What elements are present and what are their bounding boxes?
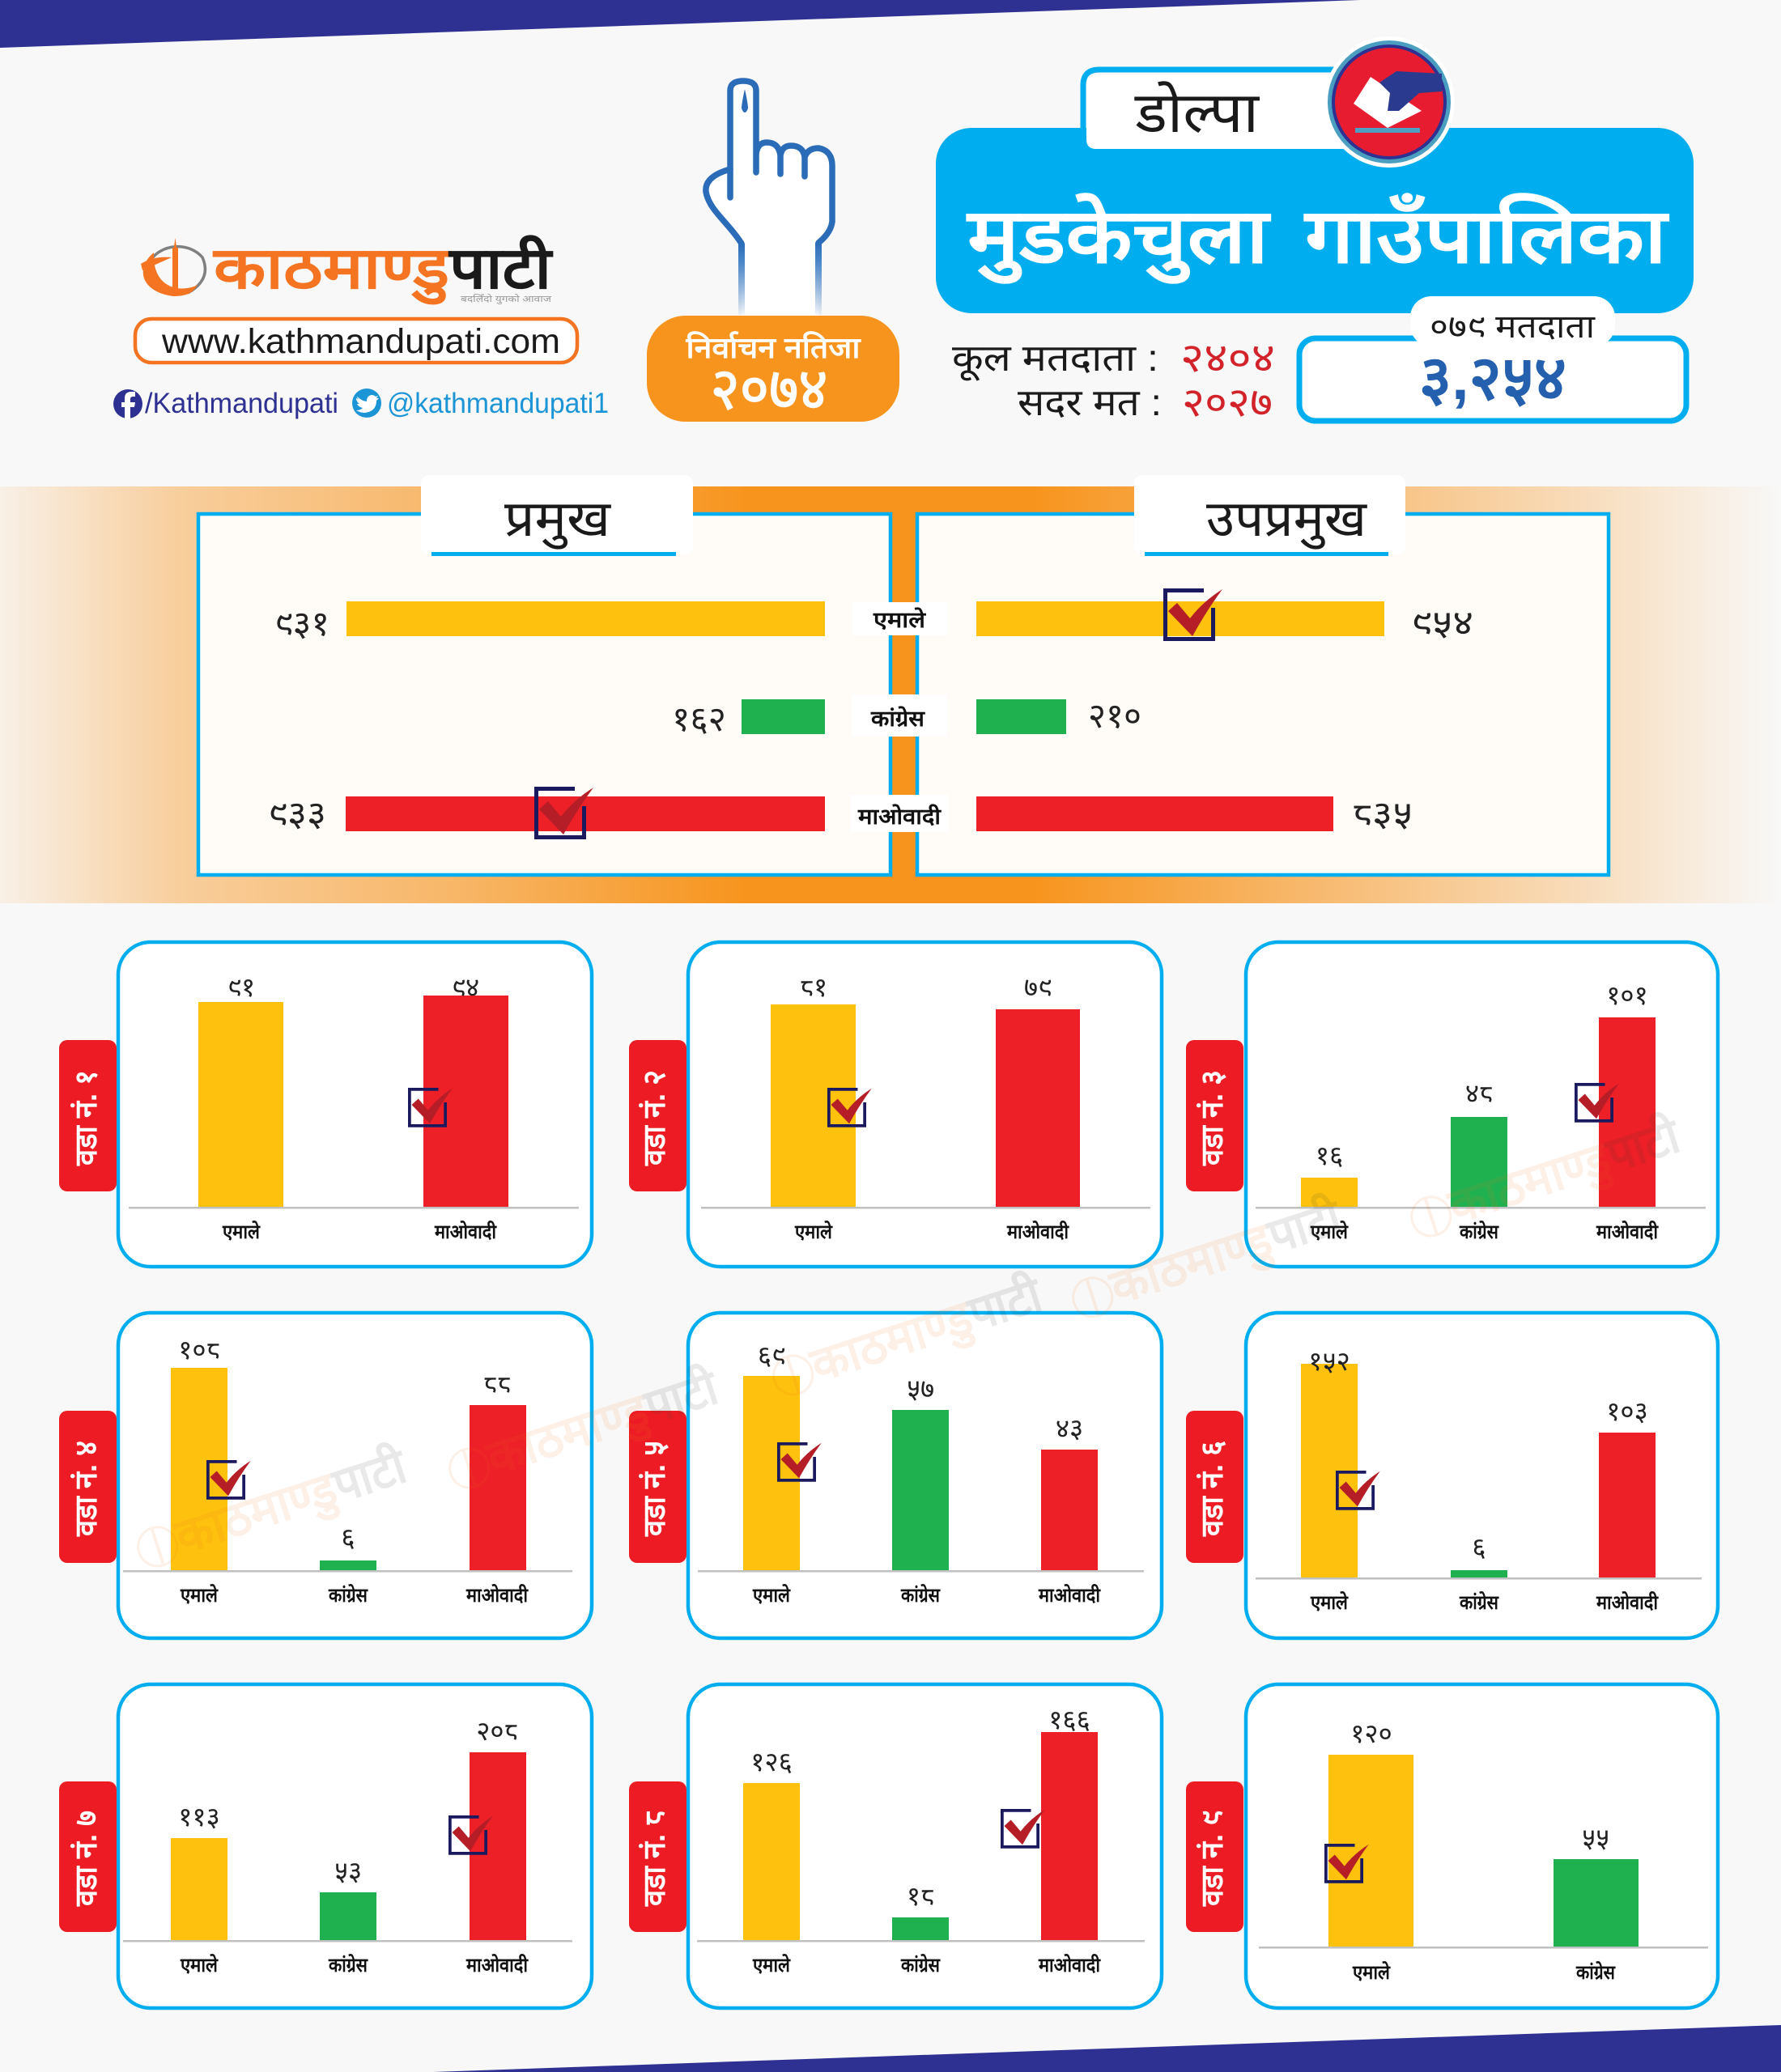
ward 5 label Maoist: माओवादी	[1038, 1584, 1101, 1607]
bar: UML deputy	[976, 601, 1384, 636]
ward 9 tab: वडा नं. ९	[1196, 1811, 1230, 1907]
ward 4	[59, 1313, 592, 1638]
ward 2 value Maoist: ७९	[1024, 972, 1052, 1002]
ward 7 label UML: एमाले	[180, 1954, 219, 1976]
ward 6 label UML: एमाले	[1310, 1591, 1350, 1614]
party label: Maoist: माओवादी	[857, 804, 942, 829]
ward 9 card	[1246, 1684, 1718, 2008]
social links	[113, 388, 609, 419]
party label: Congress	[852, 694, 947, 737]
ward 2 tab	[629, 1040, 686, 1191]
value: Maoist deputy: ८३५	[1352, 795, 1413, 834]
icon: twitter	[352, 388, 381, 418]
ward 6 value Congress: ६	[1472, 1532, 1486, 1562]
ward 9 axis	[1259, 1947, 1708, 1949]
bar: Maoist mayor	[346, 796, 825, 831]
mayor heading	[421, 475, 693, 556]
ward 3 axis	[1256, 1207, 1706, 1209]
2079 voters label: ०७९ मतदाता	[1430, 309, 1596, 345]
ward 5 label UML: एमाले	[752, 1584, 792, 1607]
ward 4 label Congress: कांग्रेस	[328, 1584, 368, 1607]
panel: deputy mayor	[917, 475, 1609, 875]
ward 1	[59, 942, 592, 1267]
2079 voters box	[1299, 296, 1686, 421]
ward 8 label UML: एमाले	[752, 1954, 792, 1976]
election result badge	[647, 316, 899, 422]
watermark: logo centre right	[1403, 1107, 1689, 1250]
value: UML mayor: ९३१	[274, 605, 329, 643]
ward 6 label Maoist: माओवादी	[1596, 1591, 1659, 1614]
ward 4 label UML: एमाले	[180, 1584, 219, 1607]
ward 1 value Maoist: ९४	[452, 972, 479, 1002]
ward 1 card	[118, 942, 592, 1267]
ward 7 tab: वडा नं. ७	[70, 1811, 104, 1907]
icon: ward 7 check	[450, 1816, 493, 1853]
ward 6 value UML: १५२	[1308, 1346, 1350, 1376]
twitter handle: @kathmandupati1	[387, 388, 609, 419]
ward 8 value Congress: १८	[907, 1881, 934, 1911]
ward 9 value UML: १२०	[1350, 1718, 1392, 1748]
valid votes value: २०२७	[1182, 380, 1273, 425]
ward 3 value Maoist: १०१	[1606, 980, 1648, 1010]
ward 5 card	[688, 1313, 1162, 1638]
ward 7	[59, 1684, 592, 2008]
party label: UML	[852, 602, 947, 635]
ward 4 bar UML	[171, 1368, 227, 1570]
badge heading: निर्वाचन नतिजा	[685, 331, 861, 364]
ward 6 label Congress: कांग्रेस	[1459, 1591, 1499, 1614]
total voters value: २४०४	[1180, 335, 1275, 380]
ward 4 value UML: १०८	[178, 1335, 220, 1365]
ward 9 label UML: एमाले	[1352, 1961, 1392, 1984]
ward 3 value Congress: ४८	[1465, 1078, 1493, 1108]
party label: UML: एमाले	[873, 607, 927, 632]
ward 5	[629, 1313, 1162, 1638]
ward 3 bar UML	[1301, 1178, 1358, 1207]
ward 7 bar Maoist	[470, 1752, 526, 1940]
logo tagline: बदलिँदो युगको आवाज	[461, 294, 552, 304]
ward 7 label Congress: कांग्रेस	[328, 1954, 368, 1976]
ward 8 value Maoist: १६६	[1048, 1705, 1090, 1734]
ward 9 value Congress: ५५	[1582, 1823, 1609, 1853]
watermark: logo left	[130, 1437, 415, 1581]
icon: ward 4 check	[208, 1461, 251, 1498]
ward 3	[1186, 942, 1718, 1267]
voter statistics	[952, 335, 1275, 425]
ward 9 label Congress: कांग्रेस	[1575, 1961, 1616, 1984]
ward 4 tab	[59, 1411, 117, 1563]
deputy mayor heading	[1134, 475, 1405, 556]
ward 2 value UML: ८१	[800, 972, 827, 1002]
ward 8 card	[688, 1684, 1162, 2008]
ward 8 value UML: १२६	[750, 1747, 793, 1777]
total voters label: कूल मतदाता :	[952, 337, 1158, 381]
ward 8	[629, 1684, 1162, 2008]
ward 8 label Congress: कांग्रेस	[900, 1954, 941, 1976]
2079 voters value: ३,२५४	[1419, 344, 1566, 413]
ward 8 tab: वडा नं. ८	[638, 1811, 672, 1907]
party label: Maoist	[850, 795, 949, 832]
bar: Congress mayor	[742, 699, 825, 734]
ward 4 axis	[123, 1570, 572, 1572]
ward 2 label Maoist: माओवादी	[1006, 1221, 1069, 1243]
ward 5 axis	[698, 1570, 1144, 1572]
icon: ward 8 check	[1002, 1810, 1045, 1847]
website pill: www.kathmandupati.com	[161, 322, 560, 361]
ward 8 label Maoist: माओवादी	[1038, 1954, 1101, 1976]
icon: ballot emblem	[1324, 36, 1455, 168]
ward 5 value UML: ६९	[758, 1340, 785, 1370]
facebook handle: /Kathmandupati	[145, 388, 338, 419]
value: UML deputy: ९५४	[1411, 604, 1473, 643]
ward 4 bar Maoist	[470, 1405, 526, 1570]
ward 1 bar Maoist	[423, 996, 508, 1207]
watermark: logo middle left	[441, 1359, 727, 1502]
ward 3 bar Congress	[1451, 1117, 1507, 1207]
ward 4 tab: वडा नं. ४	[70, 1441, 104, 1537]
top banner stripe	[0, 0, 1360, 48]
ward 9 tab	[1186, 1781, 1243, 1932]
ward 2	[629, 942, 1162, 1267]
bar: Congress deputy	[976, 699, 1066, 734]
title: rural municipality word: गाउँपालिका	[1303, 193, 1670, 278]
ward 1 label UML: एमाले	[222, 1221, 261, 1243]
ward 7 axis	[123, 1940, 572, 1942]
ward 1 tab	[59, 1040, 117, 1191]
mayor heading: प्रमुख	[504, 491, 611, 550]
valid votes label: सदर मत :	[1018, 381, 1162, 423]
panel: mayor	[198, 475, 890, 875]
ward 9	[1186, 1684, 1718, 2008]
ward 4 value Congress: ६	[341, 1522, 355, 1552]
icon: raised inked finger hand	[706, 81, 832, 316]
ward 7 label Maoist: माओवादी	[465, 1954, 529, 1976]
ward 2 label UML: एमाले	[794, 1221, 834, 1243]
ward 7 bar Congress	[320, 1892, 376, 1940]
ward 5 tab	[629, 1411, 686, 1563]
ward 6 bar Maoist	[1599, 1433, 1656, 1577]
icon: ward 2 check	[829, 1089, 872, 1126]
watermark: logo centre	[1065, 1188, 1350, 1331]
ward 5 bar Maoist	[1041, 1450, 1098, 1570]
ward 2 card	[688, 942, 1162, 1267]
icon: winner check	[536, 788, 593, 837]
ward 3 card	[1246, 942, 1718, 1267]
ward 6 tab	[1186, 1411, 1243, 1563]
bar: UML mayor	[346, 601, 825, 636]
ward 3 label Congress: कांग्रेस	[1459, 1221, 1499, 1243]
ward 3 tab: वडा नं. ३	[1196, 1070, 1230, 1166]
ward 6 tab: वडा नं. ६	[1196, 1441, 1230, 1537]
value: Maoist mayor: ९३३	[268, 795, 326, 834]
ward 5 label Congress: कांग्रेस	[900, 1584, 941, 1607]
ward 7 card	[118, 1684, 592, 2008]
ward 1 bar UML	[198, 1002, 283, 1207]
ward 8 bar Maoist	[1041, 1732, 1098, 1940]
orange band	[0, 486, 1781, 903]
ward 2 bar UML	[771, 1004, 856, 1207]
logo: Kathmandupati	[141, 235, 554, 305]
district tab	[1083, 70, 1344, 149]
ward 6 axis	[1256, 1577, 1702, 1580]
icon: winner check	[1166, 589, 1222, 639]
headline panel: municipality	[936, 128, 1694, 313]
ward 8 bar UML	[743, 1783, 800, 1940]
ward 6	[1186, 1313, 1718, 1638]
ward 5 bar UML	[743, 1376, 800, 1570]
ward 3 tab	[1186, 1040, 1243, 1191]
district name: डोल्पा	[1134, 81, 1260, 144]
logo wordmark black: पाटी	[448, 235, 554, 301]
bottom banner stripe	[433, 2025, 1781, 2072]
ward 1 axis	[129, 1207, 579, 1209]
icon: ward 3 check	[1576, 1084, 1619, 1121]
ward 3 value UML: १६	[1316, 1140, 1343, 1170]
ward 9 bar UML	[1328, 1755, 1413, 1947]
ward 4 value Maoist: ८८	[483, 1369, 511, 1399]
ward 1 value UML: ९१	[227, 972, 255, 1002]
value: Congress deputy: २१०	[1088, 697, 1141, 736]
ward 4 bar Congress	[320, 1560, 376, 1570]
ward 7 value Maoist: २०८	[476, 1716, 518, 1746]
ward 7 tab	[59, 1781, 117, 1932]
watermark: logo middle	[765, 1266, 1051, 1409]
ward 6 bar Congress	[1451, 1570, 1507, 1577]
ward 3 bar Maoist	[1599, 1017, 1656, 1207]
ward 1 tab: वडा नं. १	[70, 1070, 104, 1166]
ward 6 card	[1246, 1313, 1718, 1638]
ward 5 tab: वडा नं. ५	[638, 1441, 672, 1537]
ward 5 bar Congress	[892, 1410, 949, 1570]
ward 7 bar UML	[171, 1838, 227, 1940]
icon: facebook	[113, 389, 142, 418]
logo wordmark orange: काठमाण्डु	[212, 236, 452, 305]
badge year: २०७४	[711, 357, 827, 422]
ward 9 bar Congress	[1554, 1859, 1639, 1947]
icon: ward 9 check	[1326, 1845, 1369, 1882]
ward 5 value Maoist: ४३	[1056, 1413, 1083, 1443]
ward 8 tab	[629, 1781, 686, 1932]
icon: ward 5 check	[779, 1443, 822, 1480]
value: Congress mayor: १६२	[672, 700, 726, 739]
ward 4 card	[118, 1313, 592, 1638]
ward 6 value Maoist: १०३	[1606, 1396, 1648, 1426]
ward 6 bar UML	[1301, 1364, 1358, 1577]
ward 2 bar Maoist	[996, 1009, 1080, 1207]
ward 3 label Maoist: माओवादी	[1596, 1221, 1659, 1243]
ward 4 label Maoist: माओवादी	[465, 1584, 529, 1607]
ward 7 value Congress: ५३	[334, 1856, 362, 1886]
bar: Maoist deputy	[976, 796, 1333, 831]
deputy mayor heading: उपप्रमुख	[1206, 491, 1367, 550]
ward 7 value UML: ११३	[178, 1802, 220, 1832]
ward 2 tab: वडा नं. २	[638, 1070, 672, 1166]
ward 3 label UML: एमाले	[1310, 1221, 1350, 1243]
icon: globe and tower	[141, 238, 205, 296]
title: municipality name: मुडकेचुला	[966, 193, 1272, 284]
icon: ward 6 check	[1337, 1471, 1380, 1509]
party label: Congress: कांग्रेस	[870, 706, 926, 731]
ward 1 label Maoist: माओवादी	[434, 1221, 497, 1243]
ward 8 bar Congress	[892, 1917, 949, 1940]
ward 5 value Congress: ५७	[907, 1374, 934, 1403]
icon: ward 1 check	[410, 1089, 453, 1126]
ward 2 axis	[701, 1207, 1150, 1209]
ward 8 axis	[697, 1940, 1145, 1942]
